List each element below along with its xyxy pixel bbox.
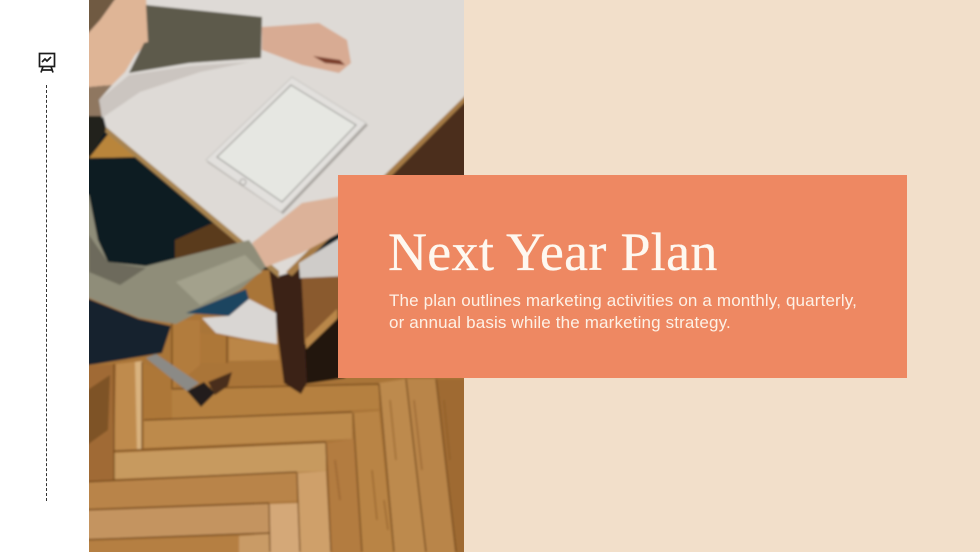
table shadow near arm (99, 62, 250, 118)
upper hand (262, 23, 351, 73)
table edge (286, 86, 475, 276)
neck and collar (89, 84, 112, 118)
brick background behind table (392, 103, 464, 175)
tablet (206, 77, 368, 214)
photo base (89, 116, 338, 272)
orange floor patch (89, 133, 139, 158)
title: Next Year Plan (388, 222, 718, 282)
panel: orange title card (338, 175, 907, 378)
shadow beside table leg (305, 312, 345, 384)
background panel: beige (464, 0, 980, 552)
wooden floor (80, 270, 475, 552)
wood under the table (300, 276, 338, 338)
jeans (80, 299, 171, 366)
lower sweater arm (80, 195, 268, 324)
text block: description: The plan outlines marketing activities on a monthly, quarterly, (389, 291, 857, 310)
upper sweater arm (129, 5, 262, 73)
hair (89, 0, 115, 32)
text block: description (389, 291, 857, 332)
text block: description: or annual basis while the marketing strategy. (389, 313, 731, 332)
dashed vertical line (46, 85, 47, 501)
lower hand (252, 195, 345, 267)
chair leg with foot (146, 354, 199, 391)
white shoe (202, 299, 277, 344)
table top (99, 0, 475, 276)
table beam (306, 309, 337, 349)
face (89, 0, 150, 89)
knee (299, 235, 345, 278)
photo: person with tablet at a table on a wooden floor (89, 0, 464, 552)
icon: presentation easel (38, 52, 56, 73)
table leg (269, 268, 307, 394)
